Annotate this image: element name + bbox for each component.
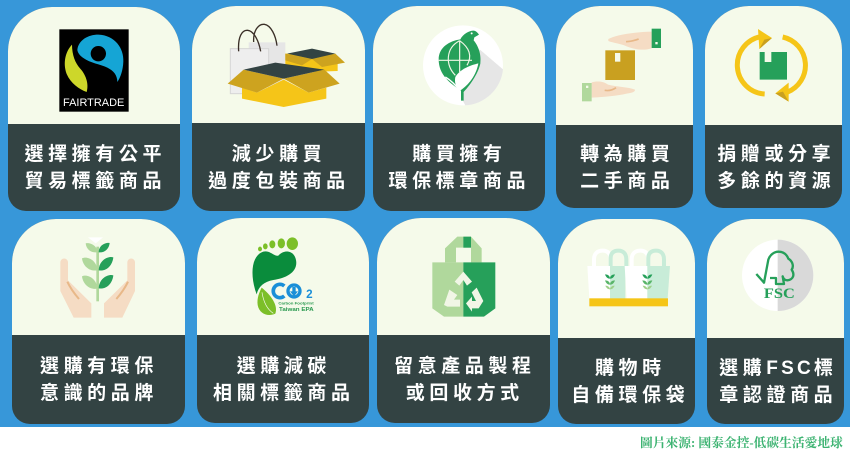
label text: 留意產品製程: [394, 356, 536, 377]
label text: 過度包裝商品: [208, 171, 350, 192]
label text: 減少購買: [232, 144, 326, 165]
label text: 選購FSC標: [719, 358, 838, 379]
label text: [394, 356, 536, 404]
icon: carbon footprint: [252, 237, 315, 315]
label text: 貿易標籤商品: [24, 171, 166, 192]
panel: carbon label: [197, 218, 369, 423]
panel: fairtrade: [8, 7, 180, 211]
label text: 意識的品牌: [40, 383, 158, 404]
icon: FSC logo: FSC: [764, 286, 795, 302]
label text: 選購減碳: [237, 356, 331, 377]
panel: FSC: [707, 219, 844, 424]
label text: 購買擁有: [412, 144, 506, 165]
label text: [388, 144, 530, 192]
label text: 自備環保袋: [571, 385, 689, 406]
icon: shopping bags: [588, 248, 670, 306]
label text: 環保標章商品: [388, 171, 530, 192]
label text: [571, 358, 689, 406]
icon: fairtrade logo: FAIRTRADE: [63, 97, 124, 109]
panel: reusable bags: [558, 219, 695, 424]
icon: fairtrade logo: [59, 29, 129, 112]
label text: 購物時: [595, 358, 666, 379]
label text: [24, 144, 166, 192]
icon: hands holding plant: [60, 238, 135, 318]
label text: [580, 144, 674, 192]
label text: [213, 356, 355, 404]
label text: 章認證商品: [719, 385, 837, 406]
panel: donate: [705, 6, 842, 208]
label text: 二手商品: [580, 171, 674, 192]
label text: [717, 144, 835, 192]
icon: recycling bag: [432, 236, 496, 317]
icon: recycle box: [734, 29, 808, 102]
panel: reduce packaging: [192, 6, 365, 211]
icon: carbon footprint: Carbon Footprint: [278, 301, 315, 305]
icon: hands passing box: [582, 28, 661, 102]
panel: production and recycling: [377, 218, 550, 423]
icon: carbon footprint: 2: [306, 288, 313, 301]
source credit: 圖片來源: 國泰金控-低碳生活愛地球: [640, 436, 843, 450]
label text: 或回收方式: [406, 383, 524, 404]
label text: 相關標籤商品: [213, 383, 355, 404]
panel: eco brands: [12, 219, 185, 424]
panel: eco label: [373, 6, 545, 211]
icon: bags and boxes: [228, 24, 345, 107]
label text: 捐贈或分享: [717, 144, 835, 165]
icon: FSC logo: [742, 240, 814, 311]
label text: 多餘的資源: [717, 171, 835, 192]
label text: 選購有環保: [40, 356, 158, 377]
panel: second hand: [556, 6, 693, 208]
icon: carbon footprint: Taiwan EPA: [279, 307, 314, 313]
label text: 選擇擁有公平: [24, 144, 166, 165]
label text: [40, 356, 158, 404]
label text: 轉為購買: [580, 144, 674, 165]
label text: [208, 144, 350, 192]
label text: [719, 358, 838, 406]
icon: green mark: [423, 26, 503, 106]
